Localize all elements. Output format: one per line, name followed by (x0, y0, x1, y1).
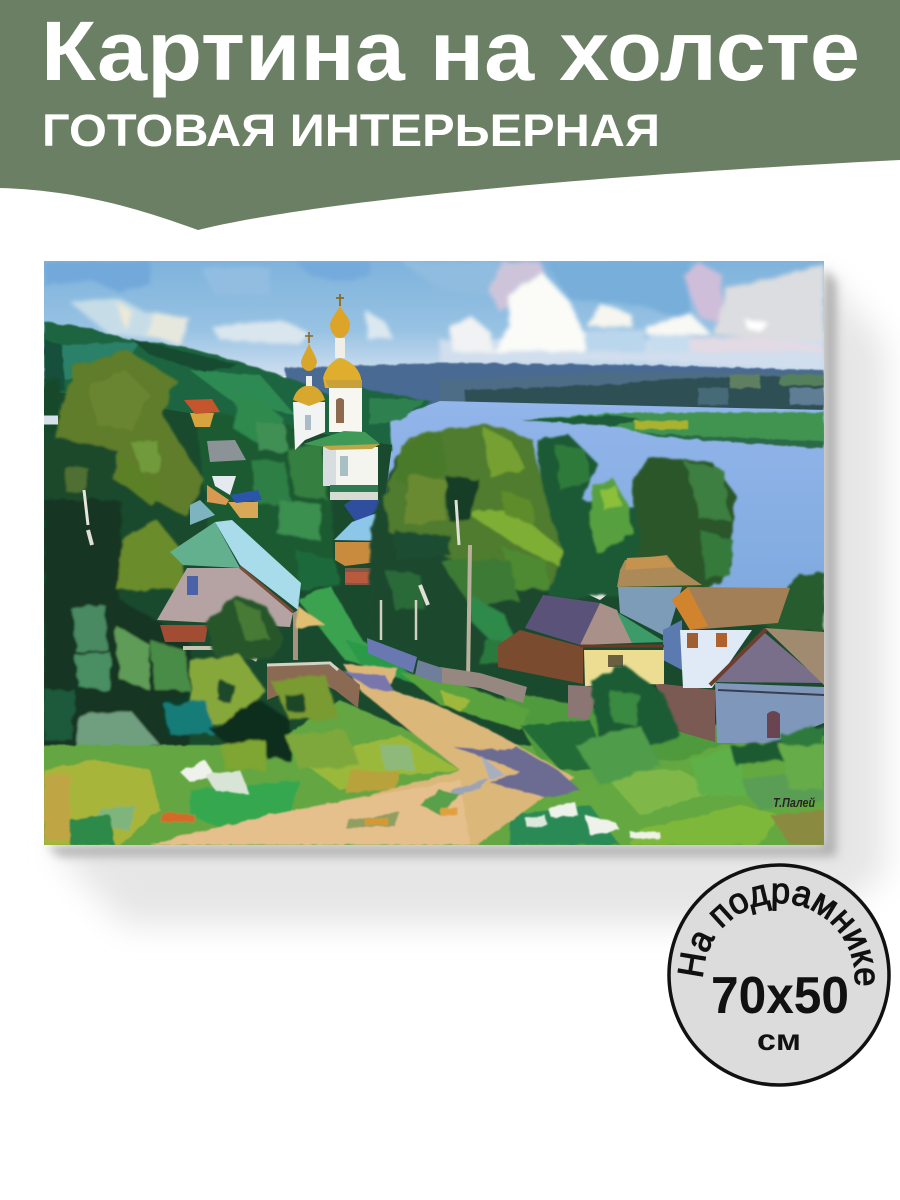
badge curved label: На подрамнике (677, 883, 875, 986)
canvas shadow (46, 268, 885, 925)
green roof (170, 522, 240, 568)
dark base under the trees (44, 390, 824, 770)
badge size: 70x50 (711, 967, 849, 1025)
small village houses (184, 399, 388, 585)
foreground barn (715, 683, 824, 743)
barn door (767, 711, 780, 738)
green church roof (303, 431, 380, 447)
distant hills (285, 363, 824, 412)
light blue roof (215, 520, 301, 610)
church (293, 294, 380, 500)
subtitle: ГОТОВАЯ ИНТЕРЬЕРНАЯ (42, 105, 660, 156)
house wall (157, 568, 293, 627)
left and central tree masses (44, 350, 340, 770)
back house (618, 587, 682, 637)
foreground bushes (165, 595, 824, 795)
purple roof house (498, 630, 583, 684)
lower church block (336, 447, 378, 485)
green-roof house (157, 520, 301, 660)
utility pole and birch trunks (381, 500, 470, 683)
artist signature: Т.Палей (773, 795, 815, 810)
wooded hillside (44, 320, 432, 452)
sky (44, 261, 824, 376)
header band (0, 0, 900, 230)
house window (187, 576, 198, 595)
blue roof house (212, 476, 236, 495)
foreground ground (40, 585, 830, 850)
red roof house (190, 413, 214, 427)
dirt road (150, 664, 580, 845)
river island (522, 412, 824, 449)
painting: village landscape (40, 261, 830, 850)
badge unit: см (757, 1024, 801, 1057)
size badge (667, 863, 891, 1087)
clouds over the river (440, 262, 824, 372)
central and right trees (370, 423, 824, 673)
side bell tower (293, 402, 325, 450)
blue roof shed (344, 499, 380, 521)
grey roof house (207, 440, 246, 462)
river (380, 401, 824, 605)
birch trunks (44, 420, 92, 545)
white wildflowers (180, 760, 660, 838)
right-hand village houses (498, 555, 824, 743)
orange roof house (663, 620, 682, 670)
village walls (183, 638, 715, 742)
title: Картина на холсте (41, 4, 860, 98)
main bell tower (329, 388, 362, 432)
